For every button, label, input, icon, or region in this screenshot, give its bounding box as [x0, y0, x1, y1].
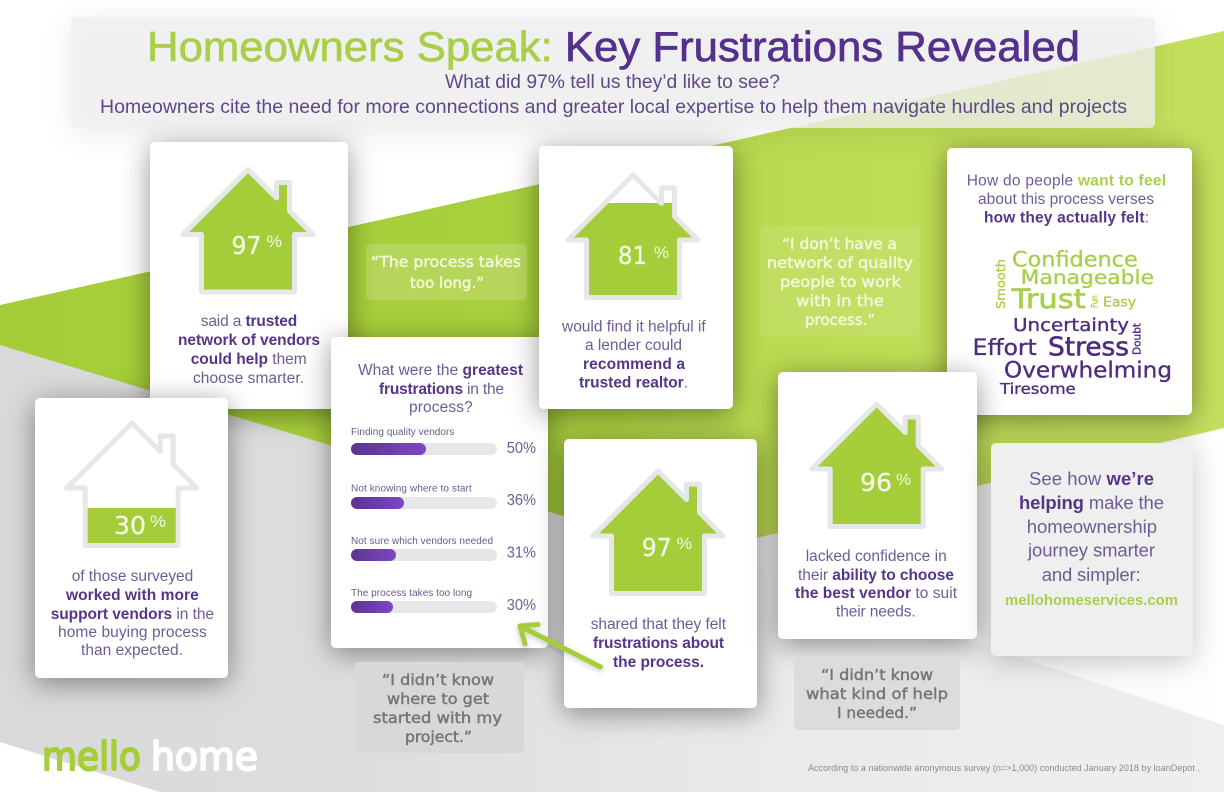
logo	[42, 735, 258, 780]
call to action text: and simpler:	[1042, 564, 1141, 585]
word cloud words	[973, 248, 1172, 398]
text: the process.	[613, 654, 704, 671]
bar: not sure which vendors needed: Not sure which vendors needed	[351, 536, 493, 547]
heading	[967, 173, 1166, 227]
text	[178, 313, 320, 387]
text: a lender could	[585, 337, 682, 354]
icon: house 81%	[568, 175, 698, 298]
quote: what kind of help: I needed.”	[837, 704, 917, 722]
title: Homeowners Speak: Key Frustrations Revealed	[147, 23, 1080, 70]
quote: process takes too long	[366, 244, 527, 300]
panel: word cloud	[947, 148, 1192, 415]
subtitle line 2: Homeowners cite the need for more connections and greater local expertise to help them navigate hurdles and projects	[100, 97, 1127, 118]
bar: not sure which vendors needed: 31%	[507, 544, 536, 561]
stat 81%: %	[654, 243, 669, 262]
quote: where to get started: project.”	[405, 728, 472, 746]
text: shared that they felt	[591, 616, 727, 633]
text: trusted realtor.	[579, 375, 688, 392]
background: light right wedge	[680, 420, 1224, 740]
quote: what kind of help	[794, 656, 960, 730]
footnote: According to a nationwide anonymous survey (n=>1,000) conducted January 2018 by loanDepot .	[808, 763, 1200, 773]
panel: 96% lacked confidence	[778, 372, 977, 639]
bar: the process takes too long	[351, 588, 536, 614]
call to action text: homeownership	[1027, 516, 1157, 537]
panel: 30% more support vendors	[35, 398, 228, 678]
icon: house 97% frustrations	[593, 471, 723, 594]
text: could help them	[191, 351, 307, 368]
quote: network of quality people: network of quality	[767, 254, 913, 272]
bar: not knowing where to start	[351, 484, 536, 509]
heading: How do people want to feel	[967, 173, 1166, 190]
word cloud words: Doubt	[1131, 322, 1144, 355]
panel: call to action	[991, 443, 1193, 656]
icon: house 97%	[183, 170, 313, 292]
word cloud words: Overwhelming	[1004, 359, 1172, 384]
text: choose smarter.	[193, 370, 304, 387]
stat 81%	[618, 241, 669, 270]
quote: network of quality people: people to work	[780, 273, 901, 291]
text	[591, 616, 727, 671]
text: their needs.	[836, 604, 916, 621]
word cloud words: Effort	[973, 336, 1037, 361]
bar: the process takes too long: 30%	[507, 597, 536, 614]
word cloud words: Smooth	[993, 259, 1008, 309]
stat 97%: 97	[232, 231, 262, 260]
quote: where to get started	[355, 662, 524, 753]
subtitle line 1: What did 97% tell us they’d like to see?	[445, 72, 780, 93]
heading: how they actually felt:	[984, 210, 1149, 227]
bar: finding quality vendors: 50%	[507, 440, 536, 457]
word cloud words: Trust	[1011, 284, 1086, 315]
stat 30%: 30	[114, 511, 146, 540]
word cloud words: Stress	[1048, 333, 1129, 363]
panel: 97% felt frustrations	[564, 439, 757, 708]
heading: What were the greatest	[358, 362, 523, 379]
stat 97%	[642, 533, 692, 562]
stat 96%	[860, 468, 911, 497]
quote: where to get started: where to get	[387, 690, 489, 708]
word cloud words: Tiresome	[999, 380, 1076, 398]
word cloud words: Manageable	[1021, 266, 1154, 289]
bar: not knowing where to start: 36%	[507, 492, 536, 509]
logo: mello	[42, 735, 141, 780]
heading: about this process verses	[978, 191, 1154, 208]
panel: 81% recommend realtor	[539, 146, 733, 409]
quote: where to get started: “I didn’t know	[382, 671, 494, 689]
text: network of vendors	[178, 332, 320, 349]
stat 97%: 97	[642, 533, 672, 562]
call to action text	[1019, 468, 1164, 585]
text	[795, 548, 958, 621]
quote: where to get started: started with my	[373, 709, 502, 727]
call to action text: helping make the	[1019, 492, 1164, 513]
quote: process takes too long: “The process takes	[371, 253, 521, 271]
background: green diagonal band	[0, 31, 1224, 554]
stat 96%: %	[896, 470, 911, 489]
quote: what kind of help: “I didn’t know	[821, 666, 933, 684]
website link: mellohomeservices.com	[1005, 593, 1178, 609]
bar: finding quality vendors	[351, 427, 536, 457]
text: of those surveyed	[72, 568, 193, 585]
quote: network of quality people: process.”	[805, 311, 875, 329]
text: support vendors in the	[51, 606, 214, 623]
text: frustrations about	[593, 635, 724, 652]
bar: the process takes too long: The process takes too long	[351, 588, 472, 599]
quote: network of quality people: “I don’t have a	[782, 235, 897, 253]
heading: process?	[409, 399, 473, 416]
heading	[358, 362, 523, 416]
stat 81%: 81	[618, 241, 647, 270]
stat 30%: %	[150, 512, 166, 531]
text: their ability to choose	[798, 567, 954, 584]
bar: not sure which vendors needed	[351, 536, 536, 561]
bar: not knowing where to start: Not knowing where to start	[351, 484, 472, 495]
header panel	[71, 17, 1155, 128]
text: than expected.	[81, 642, 183, 659]
text: recommend a	[583, 356, 685, 373]
logo: home	[151, 735, 258, 780]
quote: what kind of help: what kind of help	[806, 685, 948, 703]
text: worked with more	[65, 587, 199, 604]
stat 97%: %	[266, 232, 282, 251]
stat 97%: %	[677, 534, 692, 553]
background: grey lower band	[0, 338, 1224, 792]
quote: network of quality people: with in the	[796, 292, 884, 310]
heading: frustrations in the	[379, 381, 504, 398]
text: said a trusted	[201, 313, 297, 330]
stat 30%	[114, 511, 166, 540]
text	[51, 568, 214, 659]
text: home buying process	[58, 624, 207, 641]
text: the best vendor to suit	[795, 585, 958, 602]
text: lacked confidence in	[806, 548, 947, 565]
call to action text: See how we’re	[1029, 468, 1154, 489]
quote: network of quality people	[760, 226, 920, 337]
text: would find it helpful if	[561, 319, 706, 336]
word cloud words: Easy	[1103, 295, 1136, 311]
call to action text: journey smarter	[1027, 540, 1155, 561]
icon: house 96%	[812, 404, 942, 526]
stat 97%	[232, 231, 282, 260]
text	[561, 319, 706, 392]
bar: finding quality vendors: Finding quality vendors	[351, 427, 454, 438]
word cloud words: Confidence	[1012, 248, 1138, 272]
arrow	[520, 624, 600, 667]
word cloud words: Uncertainty	[1013, 315, 1129, 336]
stat 96%: 96	[860, 468, 892, 497]
quote: process takes too long: too long.”	[410, 274, 484, 292]
panel: 97% trusted network	[150, 142, 348, 409]
icon: house 30%	[67, 423, 197, 546]
word cloud words: Fun	[1090, 295, 1100, 308]
panel: greatest frustrations bar chart	[331, 337, 548, 648]
